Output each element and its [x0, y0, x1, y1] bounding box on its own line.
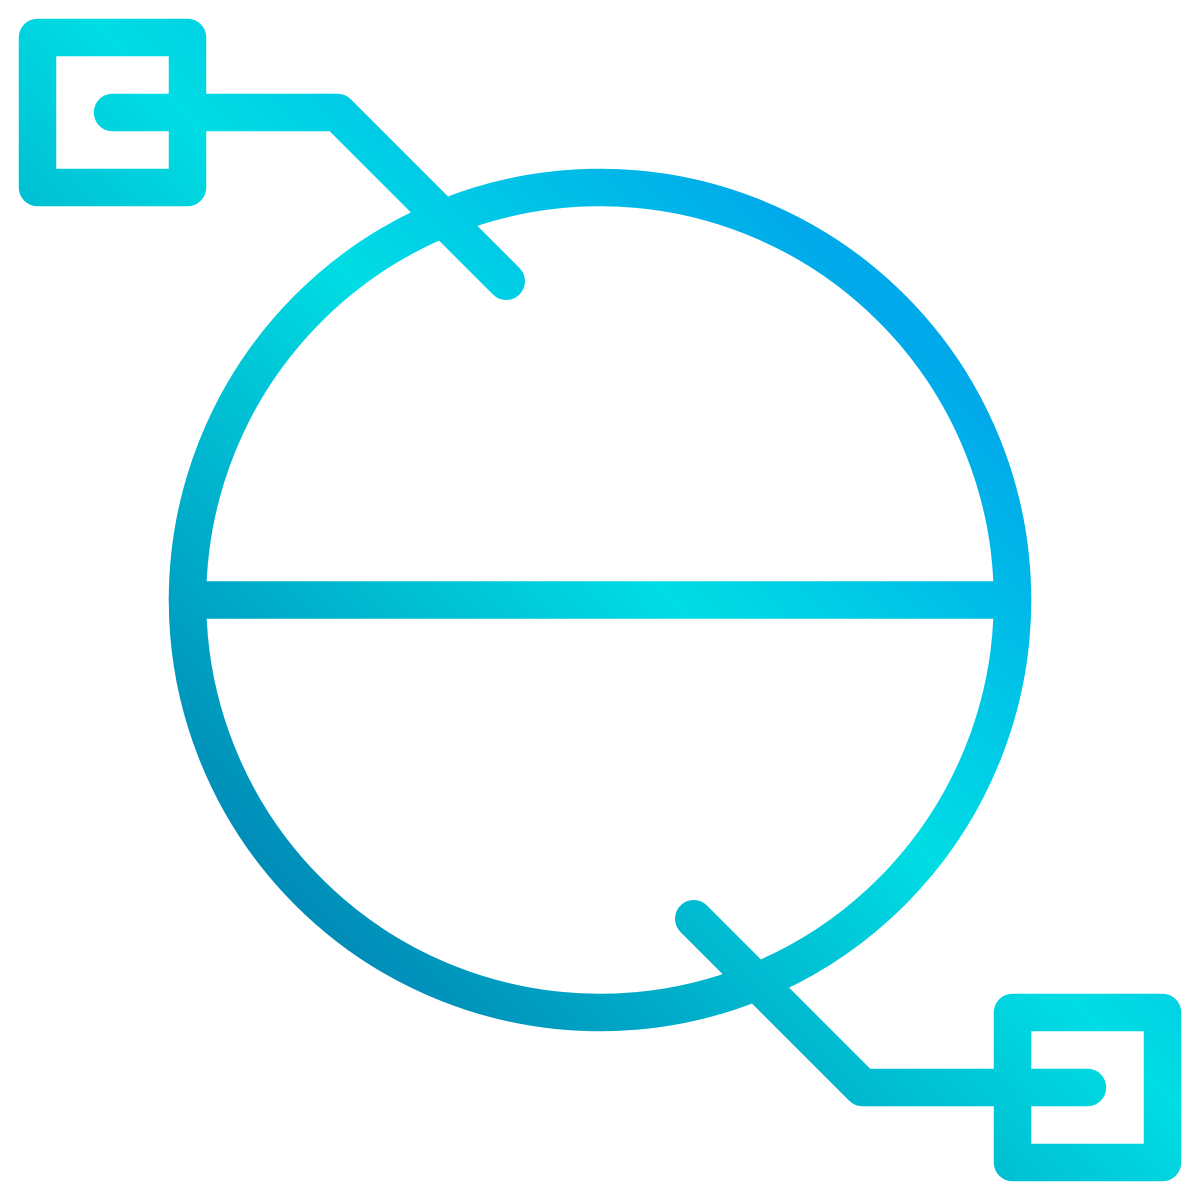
top-left square terminal	[38, 38, 188, 188]
horizontal divider through circle	[188, 581, 1012, 619]
bottom-right square terminal	[1012, 1012, 1162, 1162]
top-left connector line	[112, 112, 506, 281]
large circle	[188, 188, 1012, 1012]
bottom-right connector line	[694, 919, 1088, 1088]
